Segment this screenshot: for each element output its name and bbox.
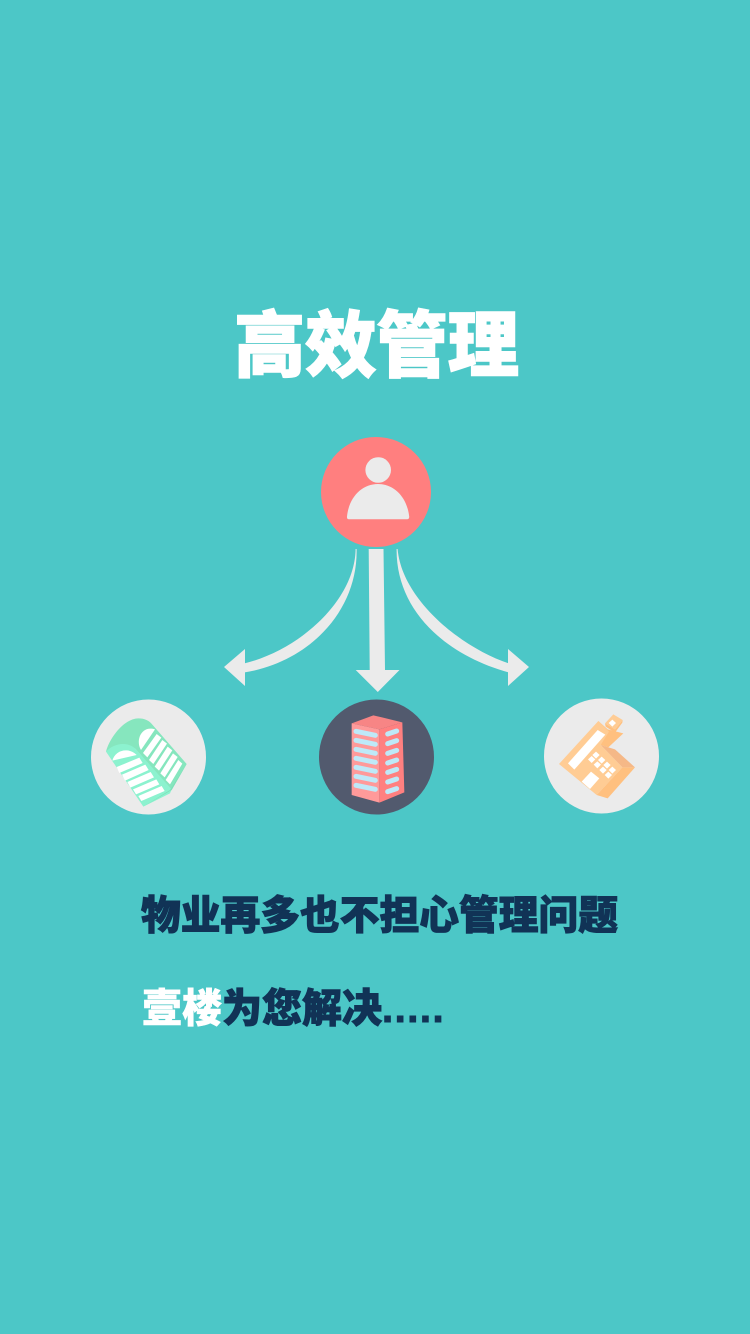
arrow: left branch: [224, 549, 357, 686]
arrow: right branch: [397, 549, 529, 686]
icon: orange telephone in grey circle: [544, 698, 659, 814]
text: first line: 物业再多也不担心管理问题: [141, 894, 618, 938]
text: second line: 壹楼为您解决.....: [142, 987, 445, 1031]
icon: red building in dark circle: [319, 700, 434, 814]
arrow: centre: [356, 549, 400, 692]
icon: person in red circle: [321, 437, 431, 547]
title: 高效管理: [234, 307, 519, 387]
icon: green book in grey circle: [91, 700, 206, 814]
